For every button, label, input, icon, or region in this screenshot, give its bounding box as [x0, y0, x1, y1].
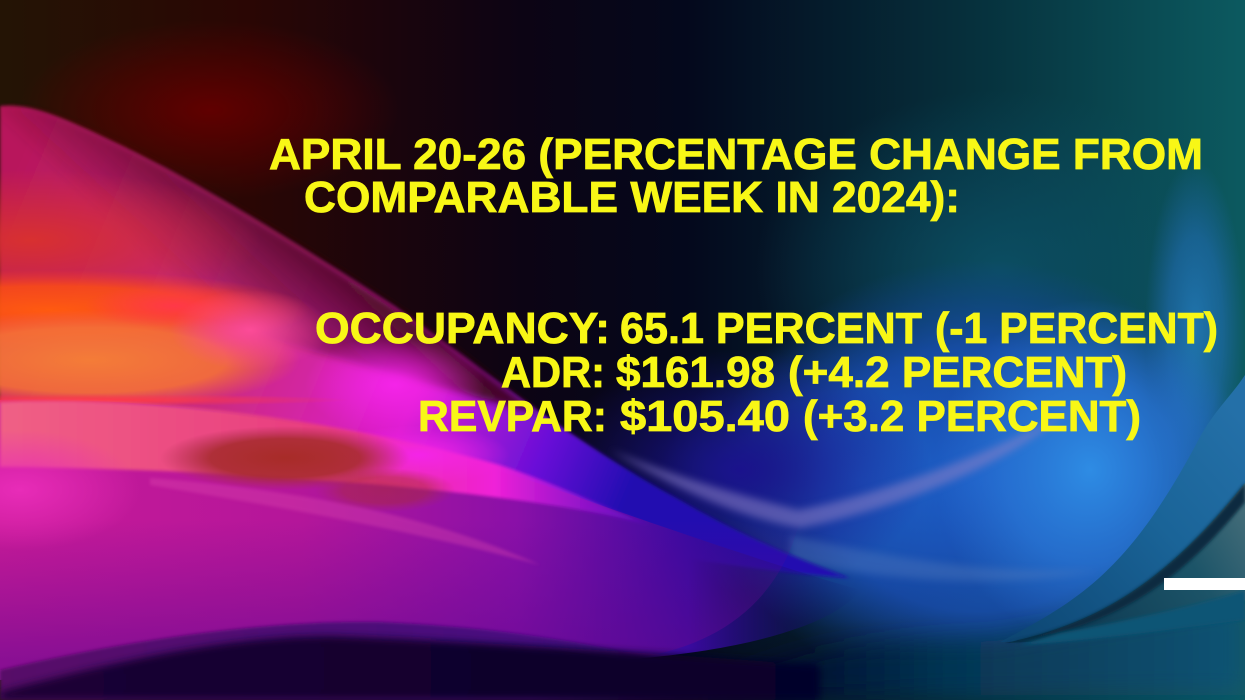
adr: $161.98 — [616, 348, 775, 397]
lower wave — [0, 400, 860, 680]
occupancy — [315, 304, 1218, 353]
heading: COMPARABLE WEEK IN 2024): — [304, 173, 960, 222]
occupancy: (-1 PERCENT) — [935, 304, 1218, 353]
flowing waves — [0, 106, 860, 700]
occupancy: 65.1 PERCENT — [620, 304, 922, 353]
white bar — [1164, 578, 1245, 590]
revpar: $105.40 — [620, 392, 790, 441]
upper wave — [0, 106, 850, 578]
adr: (+4.2 PERCENT) — [788, 348, 1127, 397]
revpar — [418, 392, 1141, 441]
occupancy: OCCUPANCY: — [315, 304, 610, 353]
adr — [501, 348, 1127, 397]
magenta highlight streak — [150, 478, 540, 565]
revpar: REVPAR: — [418, 392, 607, 441]
metrics — [315, 304, 1218, 441]
bottom-right teal floor — [700, 600, 1245, 695]
heading: APRIL 20-26 (PERCENTAGE CHANGE FROM — [269, 130, 1203, 179]
revpar: (+3.2 PERCENT) — [803, 392, 1141, 441]
pink band — [0, 401, 650, 525]
red seam line — [0, 394, 350, 406]
dark ridge — [0, 622, 760, 700]
blue corner folds — [1000, 375, 1245, 645]
dark red patch — [160, 426, 410, 490]
light streak — [610, 410, 1070, 528]
heading — [269, 130, 1203, 222]
adr: ADR: — [501, 348, 605, 397]
